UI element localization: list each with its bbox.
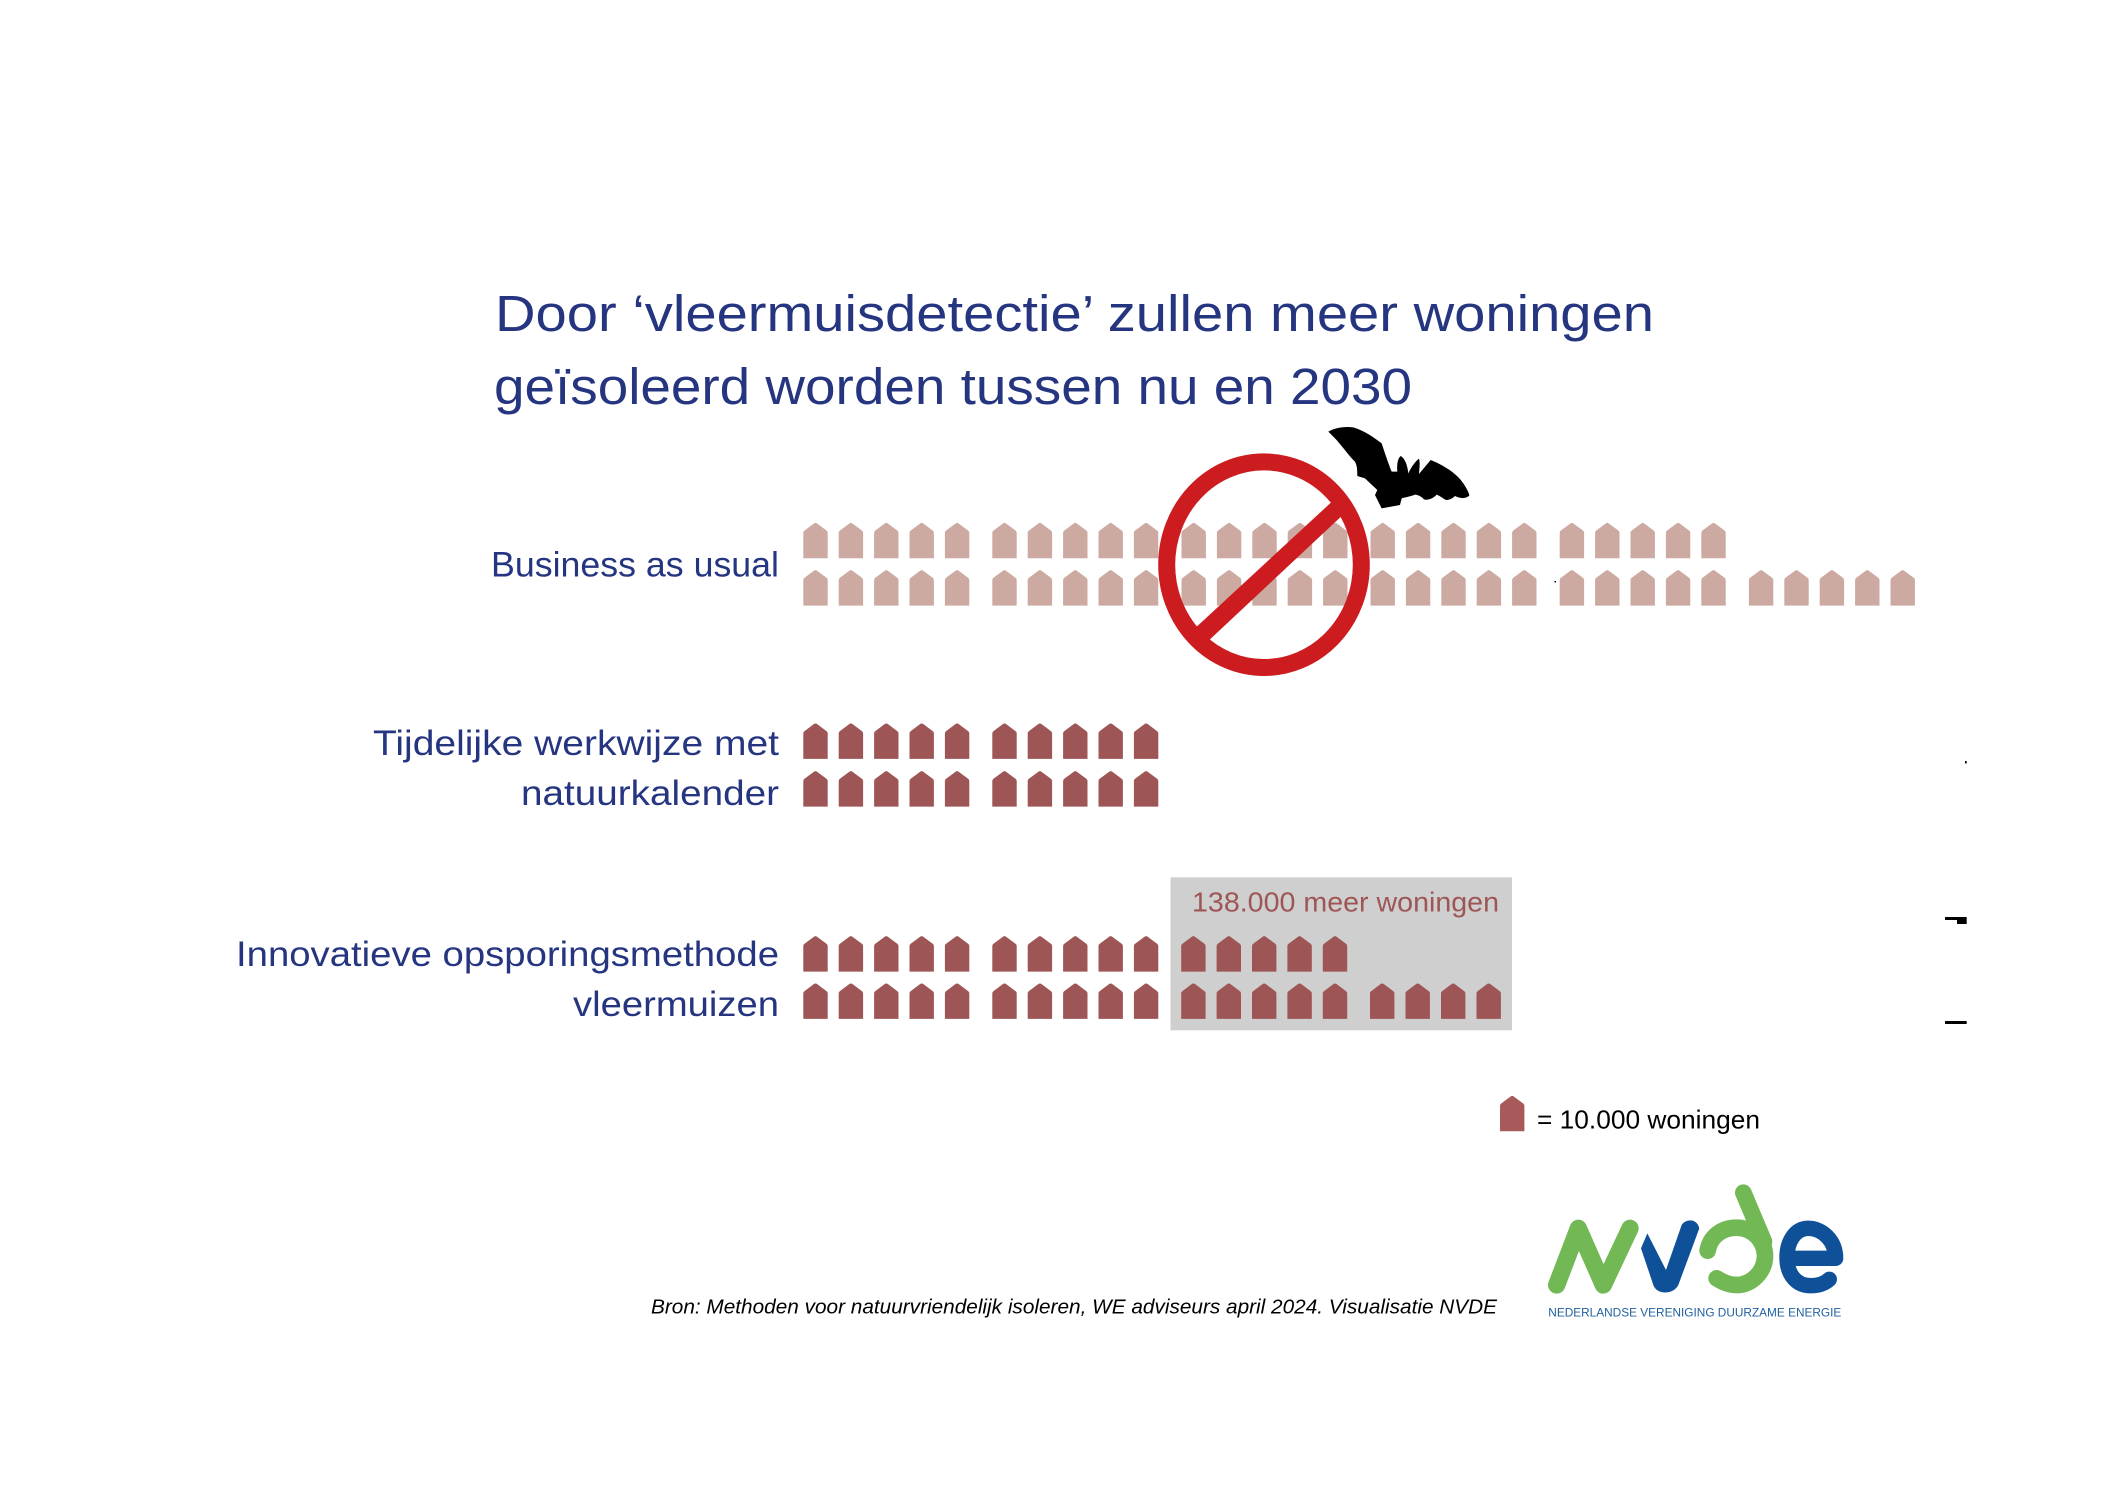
source note: Bron: Methoden voor natuurvriendelijk isoleren, WE adviseurs april 2024. Visualisatie NVDE xyxy=(651,1296,1498,1318)
label: innovatieve opsporingsmethode: Innovatieve opsporingsmethode xyxy=(236,935,779,974)
icon: prohibition sign xyxy=(1167,462,1361,668)
pictogram row: business as usual xyxy=(803,523,1915,606)
icon: bat xyxy=(1328,427,1469,508)
pictogram row: innovatieve methode xyxy=(803,936,1501,1019)
label: tijdelijke werkwijze: natuurkalender xyxy=(521,774,779,813)
label: business as usual: Business as usual xyxy=(491,546,779,584)
label: innovatieve opsporingsmethode: vleermuizen xyxy=(573,985,779,1024)
legend: = 10.000 woningen xyxy=(1537,1104,1760,1134)
title: Door ‘vleermuisdetectie’ zullen meer woningen xyxy=(495,285,1654,342)
title xyxy=(494,285,1654,415)
title: geïsoleerd worden tussen nu en 2030 xyxy=(494,358,1412,415)
legend xyxy=(1500,1096,1760,1134)
highlight panel: 138.000 meer woningen: 138.000 meer woningen xyxy=(1192,887,1499,918)
logo: NVDE: NEDERLANDSE VERENIGING DUURZAME ENERGIE xyxy=(1548,1308,1842,1320)
highlight panel: 138.000 meer woningen xyxy=(1170,877,1512,1030)
label: tijdelijke werkwijze xyxy=(373,724,779,813)
logo: NVDE xyxy=(1548,1193,1842,1320)
stray marks at right edge xyxy=(1554,581,1967,1024)
label: tijdelijke werkwijze: Tijdelijke werkwijze met xyxy=(373,724,779,763)
pictogram row: natuurkalender xyxy=(803,723,1158,807)
label: innovatieve opsporingsmethode xyxy=(236,935,779,1024)
